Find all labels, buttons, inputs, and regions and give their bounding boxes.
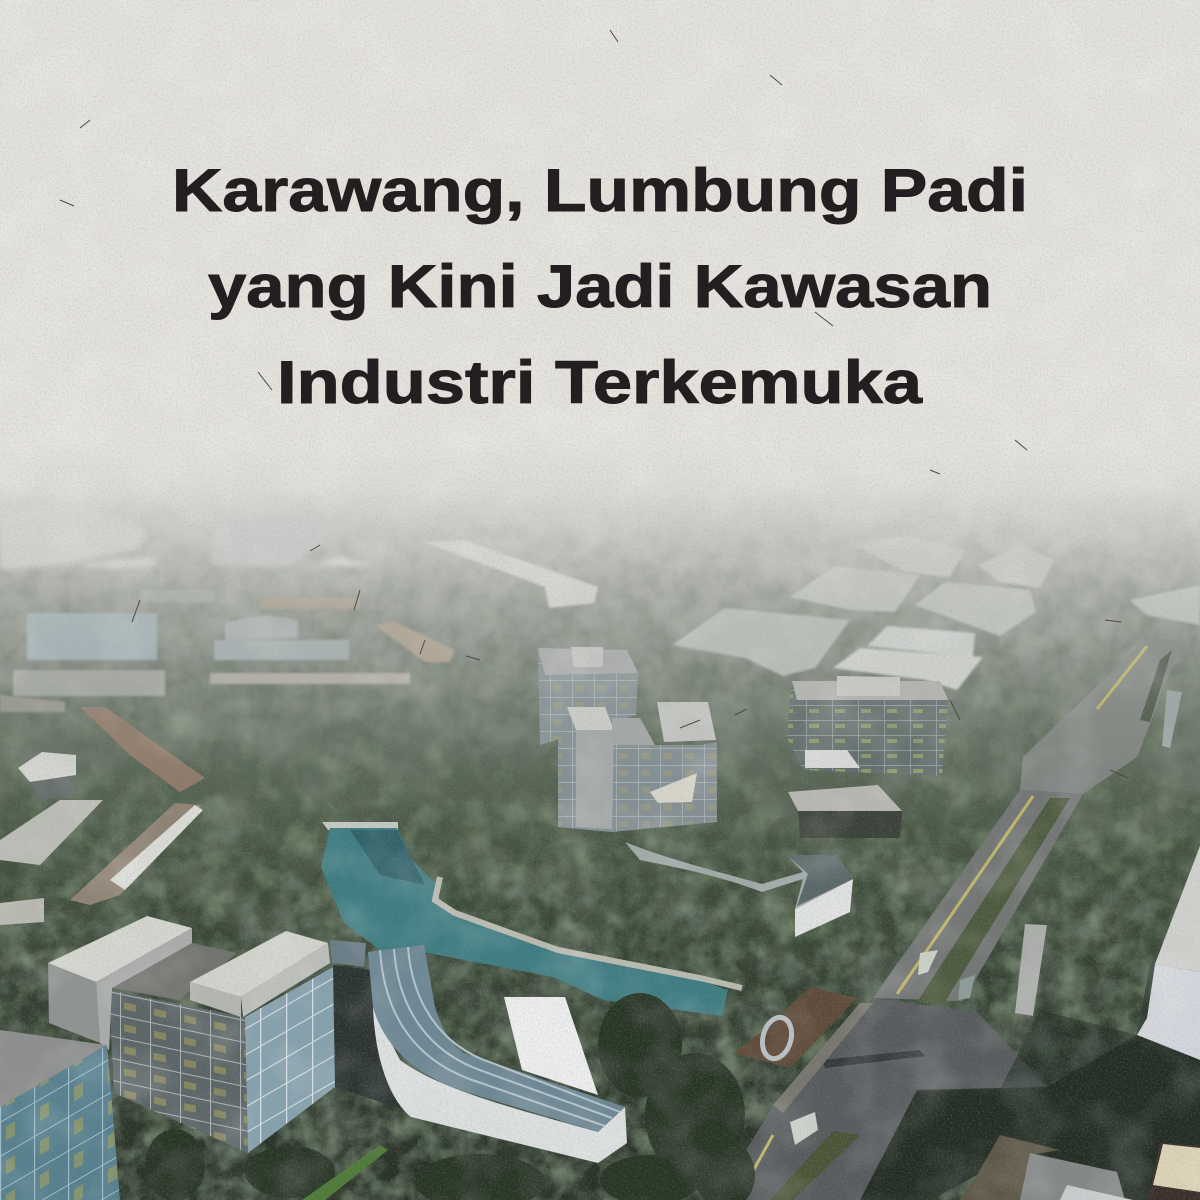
office tower front	[558, 702, 717, 832]
ring sculpture	[758, 1014, 796, 1062]
housing clusters in fog	[0, 590, 455, 712]
warehouses upper right	[672, 535, 1200, 690]
upper road tower	[1162, 690, 1182, 748]
connector roof	[330, 940, 366, 967]
brown plaza	[733, 987, 857, 1068]
office tower back	[538, 647, 638, 745]
title	[172, 157, 1028, 416]
main road	[717, 638, 1183, 1200]
dark trees lower right	[860, 1035, 1200, 1200]
curved white building foreground	[368, 945, 627, 1163]
title: yang Kini Jadi Kawasan	[208, 253, 992, 320]
road tower	[1015, 924, 1047, 1016]
foreground glass tower	[0, 1030, 120, 1200]
aerial city scene	[0, 505, 1200, 1200]
curved building on lake	[625, 842, 853, 937]
lake promenade	[435, 877, 742, 988]
title: Karawang, Lumbung Padi	[172, 157, 1028, 224]
right forest shadow	[1000, 900, 1200, 1100]
main foreground office	[48, 916, 335, 1153]
buses on road	[790, 950, 975, 1145]
title: Industri Terkemuka	[277, 349, 923, 416]
lake	[321, 828, 728, 1016]
road bridge over lake	[322, 822, 398, 830]
white factory right	[1137, 846, 1200, 1060]
bottom right complex	[960, 1135, 1200, 1200]
office building right	[787, 676, 948, 838]
forest canopy texture	[0, 480, 1200, 1200]
distant blurred housing left	[0, 505, 375, 570]
fog over horizon	[0, 470, 1200, 780]
connector dark wall	[333, 965, 405, 1110]
lake shadow	[350, 830, 425, 885]
green lawn strip	[302, 1145, 388, 1200]
paper fibres	[60, 30, 1128, 778]
long serrated building	[424, 540, 598, 608]
housing rows left	[0, 707, 205, 925]
foreground trees	[145, 993, 755, 1200]
